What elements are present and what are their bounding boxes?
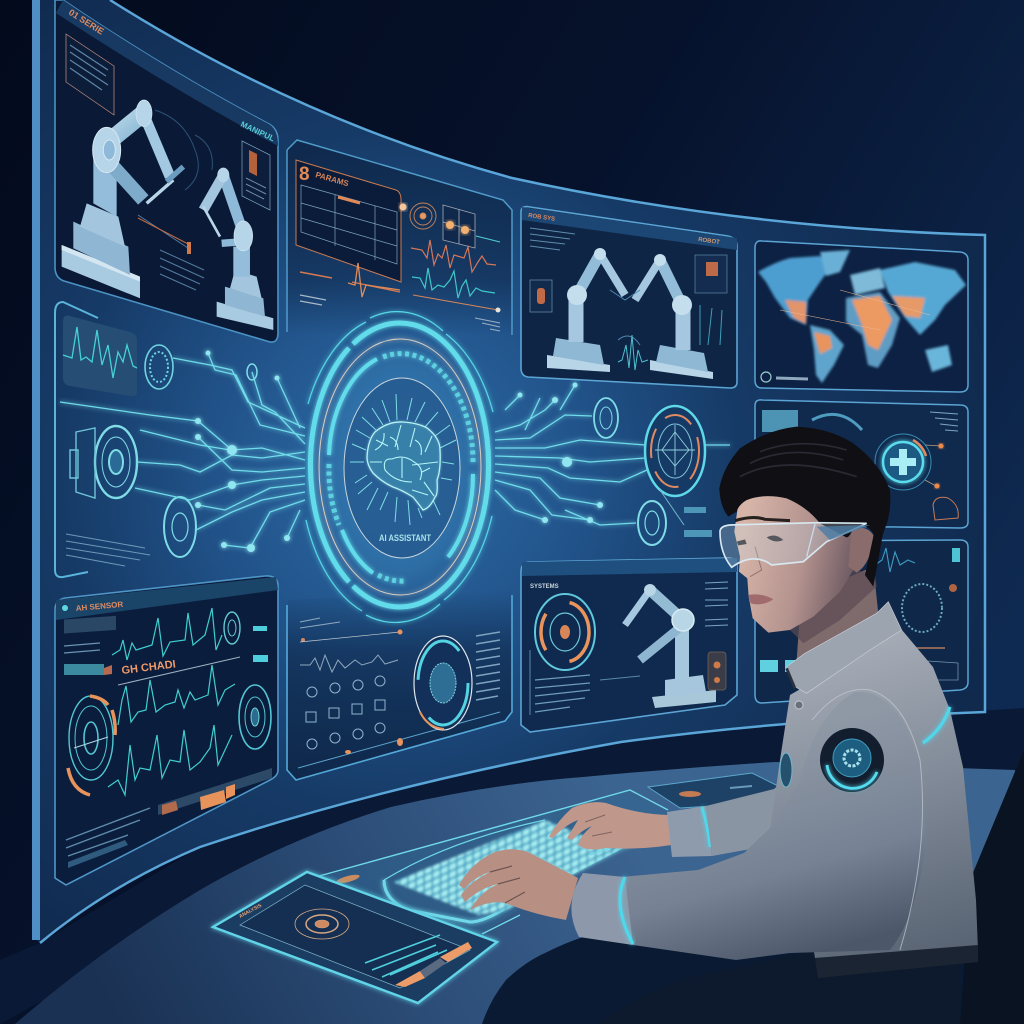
circuit traces <box>60 353 305 548</box>
holographic panel: front desk display <box>213 872 497 1003</box>
shoulder seam <box>812 689 922 950</box>
small ecg line orange <box>348 263 400 297</box>
belt strap <box>815 945 978 978</box>
right widgets <box>253 626 267 631</box>
panel: robot arms top centre right: ROBOT <box>698 237 720 246</box>
icon: brain with rays <box>350 394 456 525</box>
small heading <box>300 618 340 628</box>
lower gauge <box>164 497 196 557</box>
thick ring arcs <box>310 323 489 607</box>
data lines <box>138 215 204 290</box>
desk front underside <box>482 860 1024 1024</box>
holographic keyboard on desk <box>310 790 668 935</box>
side image box <box>242 141 270 210</box>
ear <box>848 527 873 573</box>
chart title: GH CHADI <box>121 658 176 677</box>
keys <box>393 820 618 915</box>
mouth <box>748 594 773 604</box>
map continents <box>758 250 966 383</box>
dashed arcs <box>329 354 473 581</box>
panel: medical cross <box>755 400 968 528</box>
panel: world map <box>755 241 968 392</box>
panel: brain scan <box>755 540 968 703</box>
neck shadow <box>790 570 877 643</box>
person: collar <box>787 602 902 693</box>
grid with hot spots <box>443 205 475 248</box>
desk <box>15 762 1024 1024</box>
icon: shoulder patch <box>820 728 884 792</box>
panel: robot arms top centre right <box>521 207 737 388</box>
gauge with orange arcs <box>535 594 595 670</box>
goggles <box>720 523 867 567</box>
top gauge <box>224 612 240 644</box>
circuit nodes <box>195 350 290 552</box>
panel: data table top centre <box>287 140 512 335</box>
left gauge <box>68 696 115 795</box>
brain gauge <box>414 636 472 730</box>
icon: orange digit: 8 <box>299 164 310 185</box>
icon: brain map <box>902 584 942 632</box>
icon: large robot arm <box>62 100 183 298</box>
jacket button <box>795 701 803 709</box>
eyes <box>767 536 783 541</box>
panel: robotic arms top left <box>55 0 278 342</box>
icon: robot arm <box>625 584 716 708</box>
central AI ring <box>306 312 493 622</box>
icon: medical cross gauge <box>875 434 958 520</box>
person: jacket torso <box>621 630 978 978</box>
panel: AI circuit right <box>495 382 730 545</box>
gear gauge <box>95 426 137 498</box>
header label: 01 SERIE <box>67 7 106 37</box>
person: near hand <box>459 849 578 920</box>
person's legs <box>600 950 960 1024</box>
holographic panel: far desk display <box>648 773 778 808</box>
right gauge <box>239 685 271 749</box>
header label <box>62 605 68 611</box>
lower gauge <box>638 501 666 545</box>
panel: robot arms top centre right: ROB SYS <box>528 213 555 223</box>
eyebrow <box>735 517 790 521</box>
person: near cuff <box>571 873 633 945</box>
icon: twin robots <box>547 248 713 379</box>
pale ring <box>319 339 481 595</box>
target gauge right <box>645 406 705 496</box>
panel: ECG monitor bottom left <box>55 576 278 885</box>
left stats <box>64 616 116 634</box>
bottom bar <box>158 768 272 815</box>
table box <box>296 160 401 282</box>
person: head <box>719 427 890 660</box>
icon grid <box>306 676 385 749</box>
ecg orange <box>411 240 496 272</box>
small gauge <box>145 345 173 389</box>
medium arcs <box>329 359 473 573</box>
target gauge <box>410 203 436 229</box>
panel: data table top centre: PARAMS <box>314 170 350 188</box>
waveforms <box>108 608 235 795</box>
label: AI assistant: AI ASSISTANT <box>379 533 431 543</box>
holographic panel: front desk display: ANALYSIS <box>238 903 263 920</box>
divider <box>118 657 240 685</box>
icon: small robot arm <box>203 168 273 330</box>
person: far arm and hand <box>549 785 800 857</box>
ecg cyan <box>412 268 495 298</box>
shoulder cyan line <box>923 707 950 743</box>
panel: icons and gauge bottom centre <box>287 590 512 780</box>
chest emblem <box>780 753 792 787</box>
face <box>734 480 860 633</box>
small gauge top <box>594 398 618 438</box>
chair <box>704 750 1024 1024</box>
info box <box>66 34 114 115</box>
hair <box>719 427 890 543</box>
ecg panel <box>63 316 137 396</box>
outer thin arcs <box>306 312 493 622</box>
near sleeve <box>621 692 926 960</box>
panel: AI circuit left <box>55 302 305 577</box>
panel: ECG monitor bottom left: AH SENSOR <box>75 600 124 613</box>
wall below the screen <box>0 708 1024 1024</box>
panel: robot gauge bottom right: SYSTEMS <box>530 584 559 590</box>
panel: robot gauge bottom right <box>521 558 737 732</box>
nose shadow <box>750 547 762 577</box>
panel: robotic arms top left: MANIPUL <box>239 120 276 143</box>
orange figure box <box>530 280 552 312</box>
neck <box>797 567 878 660</box>
